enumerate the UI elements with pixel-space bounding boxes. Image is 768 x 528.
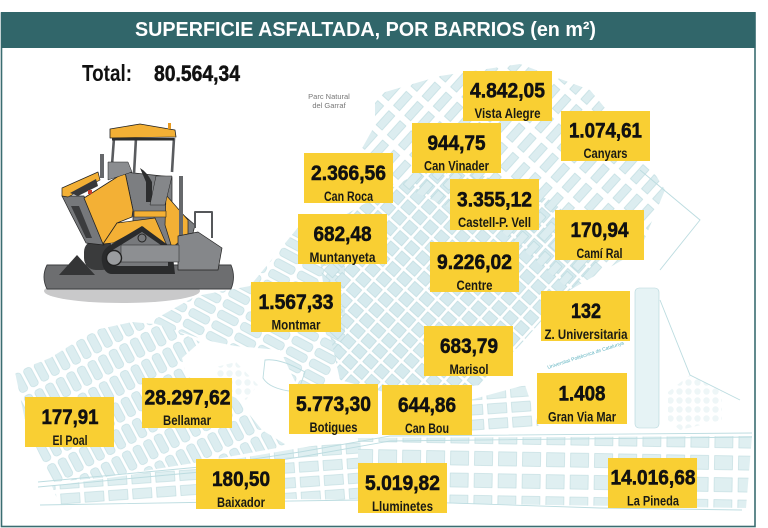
data box: Can Vinader: Can Vinader	[424, 158, 490, 174]
data box: Bellamar	[142, 378, 232, 428]
data box: Can Vinader: 944,75	[428, 131, 486, 155]
total: Total:	[82, 60, 132, 86]
side yellow panel	[84, 172, 133, 244]
data box: Muntanyeta: 682,48	[314, 222, 372, 246]
total: 80.564,34	[154, 61, 241, 86]
track frame	[108, 232, 168, 266]
data box: Castell-P. Vell	[450, 179, 539, 230]
data box: Marisol: Marisol	[450, 362, 488, 377]
data box: Botigues	[289, 384, 378, 435]
road shadow	[44, 279, 200, 303]
data box: Montmar	[251, 282, 341, 332]
data box: Botigues: 5.773,30	[296, 392, 371, 416]
data box: La Pineda: La Pineda	[627, 494, 679, 508]
map: park label: Parc Natural	[308, 92, 350, 101]
data box: Canyars	[561, 111, 650, 161]
map: park trees west	[212, 362, 258, 400]
data box: Can Vinader	[412, 123, 501, 174]
data box: Centre: 9.226,02	[437, 250, 512, 274]
map: lower west quarter	[52, 438, 365, 506]
data box: Botigues: Botigues	[310, 420, 358, 435]
hopper side	[62, 196, 104, 245]
map: western hills	[15, 322, 288, 482]
lower yellow panel	[103, 218, 168, 248]
data box: Camí Ral: Camí Ral	[576, 246, 622, 261]
data box: Z. Universitaria: Z. Universitaria	[544, 327, 628, 342]
data box: El Poal	[25, 397, 114, 448]
data box: La Pineda	[608, 458, 697, 508]
map: park trees east	[668, 375, 722, 430]
data box: Muntanyeta: Muntanyeta	[310, 250, 376, 265]
title bar	[1, 12, 756, 48]
data box: Vista Alegre: 4.842,05	[470, 78, 545, 102]
title: SUPERFICIE ASFALTADA, POR BARRIOS (en m²)	[135, 19, 596, 41]
data box: Camí Ral	[555, 210, 644, 261]
hopper top	[62, 172, 100, 197]
map: northern quarter	[350, 64, 665, 290]
cab posts	[112, 138, 174, 174]
rear roller	[84, 240, 114, 270]
data box: Vista Alegre	[463, 71, 552, 121]
illustration: asphalt paver	[44, 123, 234, 303]
data box: Centre: Centre	[456, 278, 493, 293]
map: upper hills	[150, 215, 345, 392]
data box: El Poal: 177,91	[42, 405, 99, 429]
screed	[178, 232, 222, 270]
map: park label	[308, 92, 350, 110]
rear yellow panel	[165, 195, 188, 248]
data box: Gran Via Mar: Gran Via Mar	[548, 410, 617, 424]
data box: Canyars: 1.074,61	[569, 118, 642, 142]
data box: Gran Via Mar: 1.408	[558, 382, 606, 406]
data box: Centre	[430, 242, 519, 293]
data box: Montmar: Montmar	[272, 318, 321, 332]
map: middle grid near university	[470, 385, 540, 432]
data box: Lluminetes	[358, 463, 447, 514]
exhausts	[102, 154, 181, 240]
data box: Canyars: Canyars	[584, 146, 628, 161]
map: university text: Universitat Politècnica de Catalunya	[547, 340, 625, 371]
data box: Z. Universitaria: 132	[571, 299, 601, 323]
data box: Can Bou: Can Bou	[405, 421, 449, 436]
data box: Castell-P. Vell: 3.355,12	[457, 188, 532, 212]
data box: Can Roca	[304, 153, 393, 204]
data box: El Poal: El Poal	[52, 433, 88, 448]
data box: Can Bou: 644,86	[398, 393, 456, 417]
data box: Montmar: 1.567,33	[258, 290, 334, 314]
asphalt pile	[59, 255, 95, 275]
data box: Can Roca: Can Roca	[324, 189, 373, 204]
data box: Can Roca: 2.366,56	[311, 161, 386, 185]
data box: Baixador: Baixador	[217, 495, 266, 510]
map: main roads	[38, 170, 752, 510]
data box: Bellamar: Bellamar	[163, 413, 212, 428]
data box: Lluminetes: 5.019,82	[365, 471, 440, 495]
data box: Baixador	[196, 459, 285, 510]
data box: La Pineda: 14.016,68	[610, 466, 696, 490]
data box: Gran Via Mar	[537, 373, 627, 424]
data box: Vista Alegre: Vista Alegre	[474, 106, 541, 121]
map: southern grid	[358, 436, 752, 508]
data box: Marisol	[424, 326, 513, 377]
cab roof	[110, 124, 176, 138]
machine body	[125, 172, 195, 245]
data box: Marisol: 683,79	[440, 334, 498, 358]
map: harbour canal	[635, 288, 659, 428]
data box: Camí Ral: 170,94	[570, 218, 629, 242]
data box: Muntanyeta	[298, 214, 387, 265]
track wheel	[106, 250, 122, 266]
seat and controls	[140, 168, 152, 202]
map: park label: del Garraf	[312, 101, 347, 110]
total	[82, 60, 241, 86]
data box: Z. Universitaria	[541, 291, 630, 342]
data box: Baixador: 180,50	[212, 467, 270, 491]
road	[44, 265, 234, 289]
data box: Can Bou	[382, 385, 472, 436]
map: downtown grid	[320, 160, 610, 395]
data box: Castell-P. Vell: Castell-P. Vell	[458, 215, 531, 230]
data box: Bellamar: 28.297,62	[144, 386, 231, 410]
track	[102, 226, 175, 274]
engine hood	[108, 162, 132, 180]
data box: Lluminetes: Lluminetes	[372, 499, 433, 514]
